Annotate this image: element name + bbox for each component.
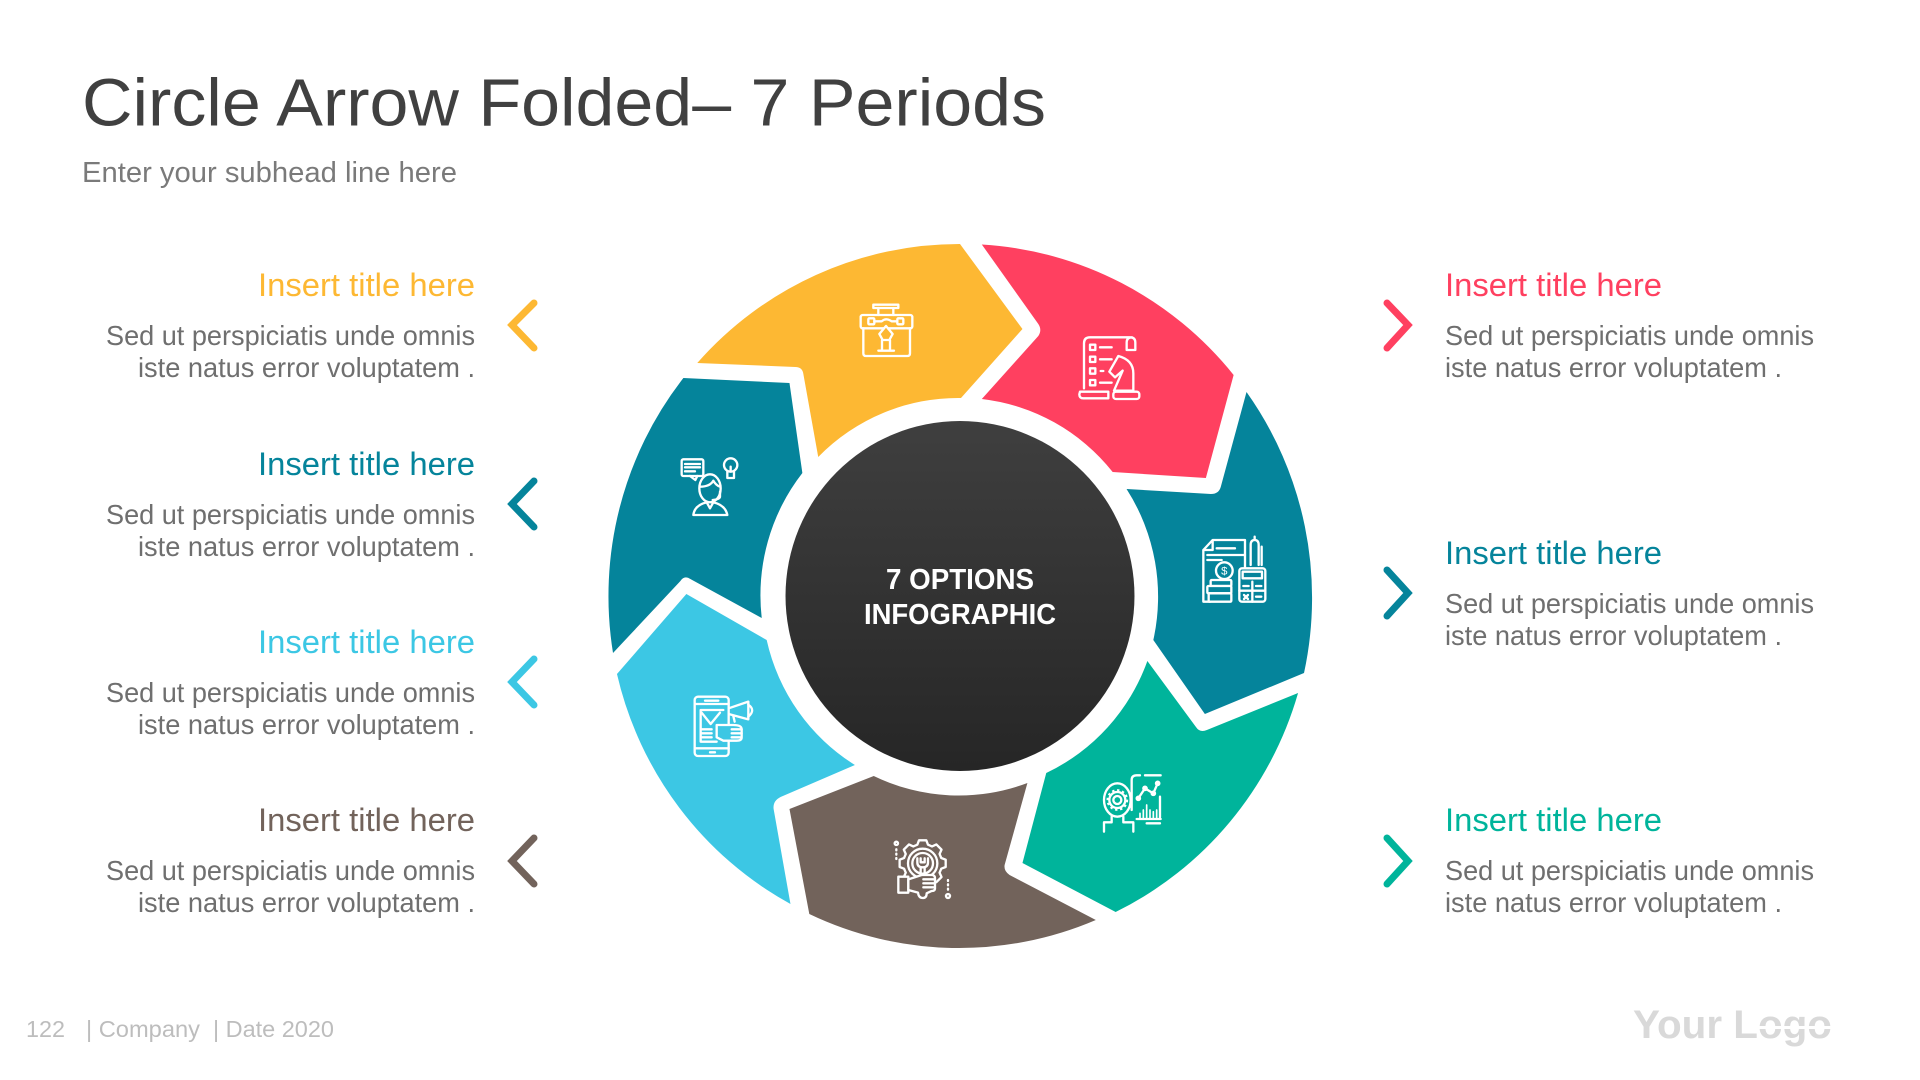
footer: | Date 2020	[213, 1016, 334, 1042]
footer: | Company	[86, 1016, 201, 1042]
heading: Insert title here	[1445, 267, 1662, 303]
icon: finance document and calculator	[1203, 537, 1265, 602]
chevron	[512, 838, 534, 884]
centre text: INFOGRAPHIC	[864, 599, 1056, 631]
body text: Sed ut perspiciatis unde omnis	[1445, 588, 1814, 619]
body text	[106, 320, 475, 383]
chevron	[512, 659, 534, 705]
body text	[1445, 855, 1814, 918]
right item 2: teal	[1387, 535, 1814, 651]
chevron	[1387, 838, 1408, 884]
footer	[26, 1016, 334, 1042]
body text: Sed ut perspiciatis unde omnis	[106, 855, 475, 886]
centre text	[864, 564, 1056, 631]
body text: iste natus error voluptatem .	[1445, 352, 1782, 383]
segment: teal left	[608, 378, 802, 653]
logo: Your Logo	[1633, 1003, 1832, 1047]
icon: mobile marketing megaphone	[695, 697, 752, 756]
segment: brown	[789, 776, 1096, 948]
segment: light blue	[617, 594, 855, 904]
body text: iste natus error voluptatem .	[138, 709, 475, 740]
heading: Insert title here	[258, 624, 475, 660]
chevron	[1387, 303, 1408, 348]
body text	[106, 677, 475, 740]
subtitle: Enter your subhead line here	[82, 157, 457, 189]
heading: Insert title here	[1445, 802, 1662, 838]
segment: green	[1022, 661, 1298, 912]
body text: iste natus error voluptatem .	[138, 352, 475, 383]
body text: Sed ut perspiciatis unde omnis	[106, 499, 475, 530]
centre text: 7 OPTIONS	[886, 564, 1034, 596]
icon: support person with idea	[682, 458, 737, 515]
body text	[1445, 588, 1814, 651]
left item 3: light blue	[106, 624, 534, 740]
body text: Sed ut perspiciatis unde omnis	[106, 677, 475, 708]
icon: head gear and analytics	[1104, 775, 1161, 832]
left item 4: brown	[106, 802, 534, 918]
segment: teal right	[1127, 392, 1312, 714]
body text	[1445, 320, 1814, 383]
left item 1: yellow	[106, 267, 534, 383]
centre circle	[786, 421, 1134, 771]
chevron	[1387, 570, 1408, 616]
body text: iste natus error voluptatem .	[1445, 620, 1782, 651]
folded ring and centre	[608, 244, 1312, 948]
body text	[106, 499, 475, 562]
segment: red	[982, 244, 1234, 478]
title: Circle Arrow Folded– 7 Periods	[82, 66, 1046, 140]
footer: 122	[26, 1016, 65, 1042]
body text: iste natus error voluptatem .	[138, 531, 475, 562]
right item 1: red	[1387, 267, 1814, 383]
heading: Insert title here	[258, 802, 475, 838]
left item 2: teal	[106, 446, 534, 562]
body text: iste natus error voluptatem .	[138, 887, 475, 918]
icon: finance document and calculator: $	[1221, 565, 1228, 577]
chevron	[512, 303, 534, 348]
segment: yellow	[697, 244, 1022, 457]
body text: Sed ut perspiciatis unde omnis	[1445, 855, 1814, 886]
icon: strategy scroll and knight	[1079, 337, 1139, 399]
icon: briefcase with pen	[861, 305, 912, 356]
body text: iste natus error voluptatem .	[1445, 887, 1782, 918]
body text: Sed ut perspiciatis unde omnis	[1445, 320, 1814, 351]
circular arrow diagram	[608, 244, 1312, 948]
heading: Insert title here	[258, 446, 475, 482]
body text	[106, 855, 475, 918]
icon: wrench gear and hand	[895, 840, 950, 898]
body text: Sed ut perspiciatis unde omnis	[106, 320, 475, 351]
chevron	[512, 481, 534, 527]
heading: Insert title here	[258, 267, 475, 303]
right item 3: green	[1387, 802, 1814, 918]
heading: Insert title here	[1445, 535, 1662, 571]
